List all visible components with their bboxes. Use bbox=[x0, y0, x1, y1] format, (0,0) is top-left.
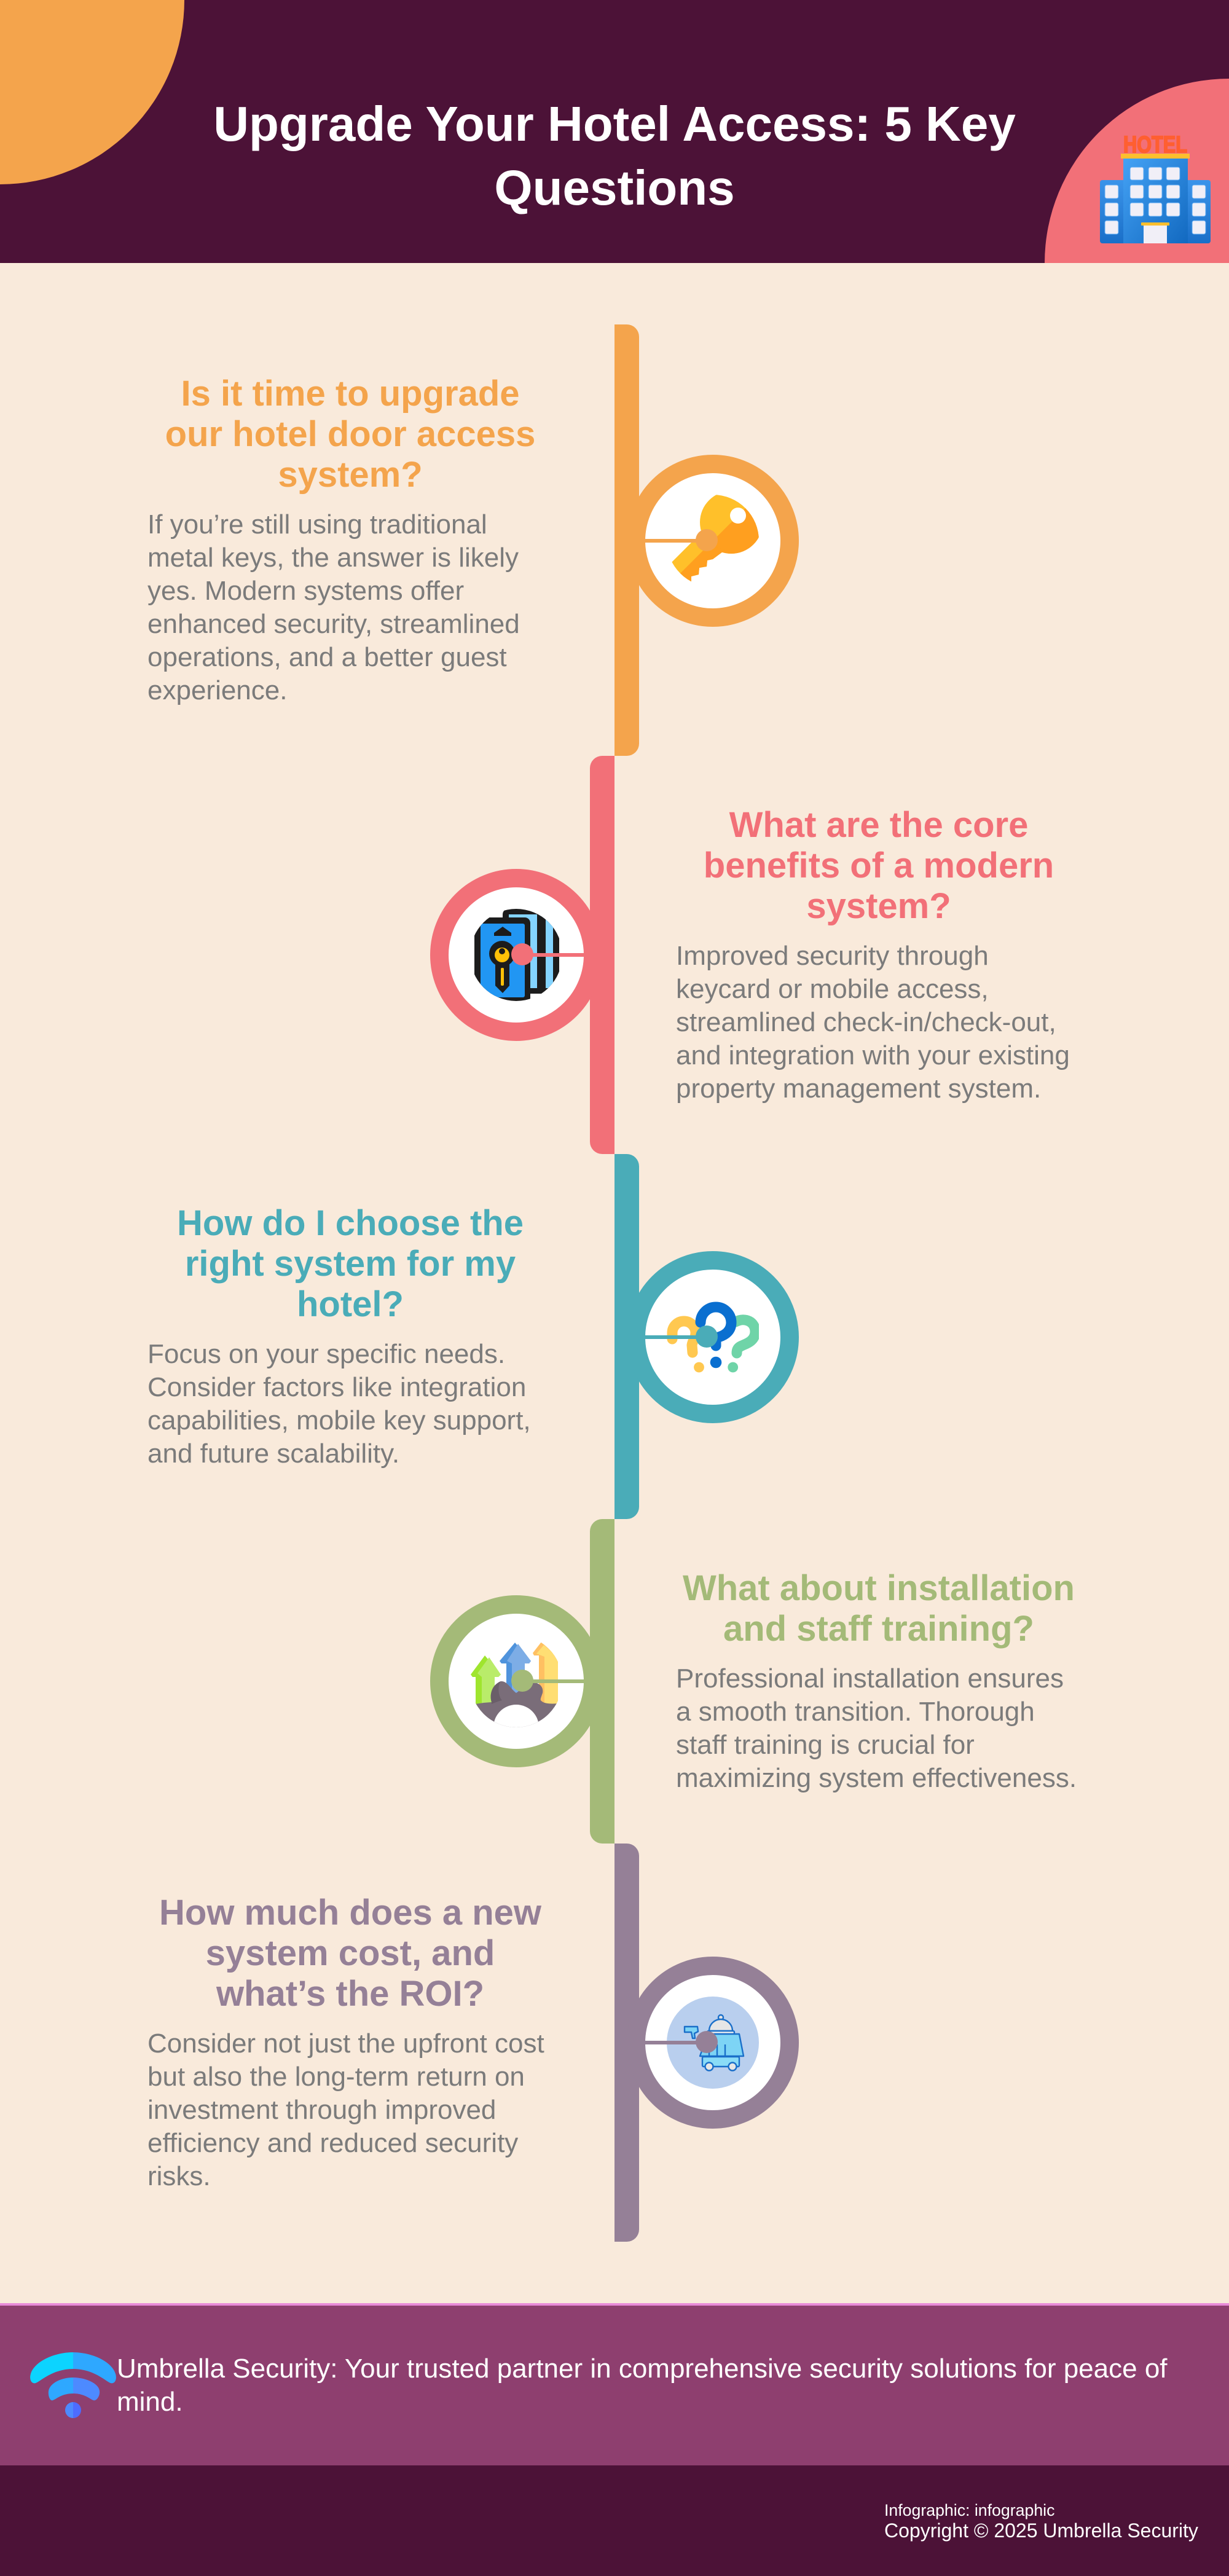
heading bbox=[159, 1893, 541, 2014]
question heading and answer bbox=[676, 805, 1070, 1104]
heading bbox=[177, 1203, 524, 1324]
question heading and answer bbox=[147, 1893, 544, 2191]
answer text: and integration with your existing bbox=[676, 1040, 1070, 1070]
connector dot bbox=[696, 1325, 718, 1348]
answer text bbox=[676, 1663, 1077, 1793]
footer banner bbox=[0, 2303, 1229, 2465]
timeline bar bbox=[614, 1844, 639, 2242]
answer text: enhanced security, streamlined bbox=[147, 609, 520, 639]
footer message: mind. bbox=[117, 2387, 183, 2417]
answer text bbox=[147, 1339, 531, 1469]
heading: what’s the ROI? bbox=[216, 1974, 484, 2014]
heading: our hotel door access bbox=[165, 414, 535, 454]
header band bbox=[0, 0, 1229, 263]
heading: right system for my bbox=[185, 1244, 516, 1284]
answer text: capabilities, mobile key support, bbox=[147, 1405, 531, 1435]
heading: What are the core bbox=[729, 805, 1028, 845]
answer text: staff training is crucial for bbox=[676, 1730, 975, 1760]
icon ring: key card bbox=[430, 869, 602, 1041]
connector line bbox=[522, 1679, 584, 1683]
answer text bbox=[147, 2028, 544, 2191]
answer text: a smooth transition. Thorough bbox=[676, 1697, 1035, 1727]
connector dot bbox=[696, 2031, 718, 2053]
answer text: yes. Modern systems offer bbox=[147, 576, 464, 606]
panel: question 5 bbox=[147, 1844, 799, 2242]
timeline bar bbox=[614, 324, 639, 756]
answer text: property management system. bbox=[676, 1074, 1041, 1104]
answer text: risks. bbox=[147, 2161, 211, 2191]
icon ring: service cart bbox=[627, 1957, 799, 2129]
connector dot bbox=[511, 943, 533, 965]
connector dot bbox=[511, 1670, 533, 1692]
icon: key cards bbox=[474, 909, 559, 1001]
answer text: investment through improved bbox=[147, 2095, 496, 2125]
credit line: Infographic: infographic bbox=[884, 2501, 1054, 2519]
timeline bar bbox=[614, 1154, 639, 1519]
connector dot bbox=[696, 529, 718, 551]
answer text: operations, and a better guest bbox=[147, 642, 507, 672]
panel: question 2 bbox=[430, 756, 1070, 1154]
heading: system? bbox=[806, 886, 951, 926]
answer text bbox=[147, 509, 520, 705]
answer text: experience. bbox=[147, 675, 287, 705]
answer text: and future scalability. bbox=[147, 1439, 399, 1469]
question heading and answer bbox=[147, 1203, 531, 1469]
question heading and answer bbox=[147, 374, 535, 705]
timeline bar bbox=[590, 1519, 614, 1844]
answer text: Consider factors like integration bbox=[147, 1372, 526, 1402]
heading: hotel? bbox=[297, 1284, 404, 1324]
bottom credits band bbox=[0, 2465, 1229, 2576]
answer text: streamlined check-in/check-out, bbox=[676, 1007, 1056, 1037]
timeline bar bbox=[590, 756, 614, 1154]
answer text: Consider not just the upfront cost bbox=[147, 2028, 544, 2059]
icon ring: gear and arrows bbox=[430, 1595, 602, 1767]
heading: Is it time to upgrade bbox=[181, 374, 520, 414]
panel: question 3 bbox=[147, 1154, 799, 1519]
heading: system cost, and bbox=[206, 1933, 495, 1973]
heading: system? bbox=[278, 455, 423, 495]
title: Upgrade Your Hotel Access: 5 Key bbox=[213, 96, 1016, 151]
answer text: keycard or mobile access, bbox=[676, 974, 989, 1004]
icon ring: question marks bbox=[627, 1251, 799, 1423]
answer text: maximizing system effectiveness. bbox=[676, 1763, 1077, 1793]
connector line bbox=[645, 539, 707, 543]
connector line bbox=[522, 953, 584, 957]
heading: How do I choose the bbox=[177, 1203, 524, 1243]
title: Questions bbox=[494, 160, 735, 215]
heading: How much does a new bbox=[159, 1893, 541, 1933]
heading: and staff training? bbox=[723, 1609, 1034, 1649]
copyright: Copyright © 2025 Umbrella Security bbox=[884, 2519, 1198, 2542]
answer text: Focus on your specific needs. bbox=[147, 1339, 505, 1369]
answer text: efficiency and reduced security bbox=[147, 2128, 518, 2158]
icon: gear and upward arrows bbox=[471, 1642, 558, 1727]
answer text: Improved security through bbox=[676, 941, 989, 971]
icon: question marks bbox=[667, 1302, 759, 1373]
decorative orange circle bbox=[0, 0, 184, 184]
answer text: Professional installation ensures bbox=[676, 1663, 1064, 1694]
icon: hotel building bbox=[1100, 134, 1211, 243]
footer message bbox=[117, 2354, 1168, 2417]
icon ring: key bbox=[627, 455, 799, 627]
heading bbox=[683, 1568, 1075, 1649]
icon: wifi signal bbox=[30, 2352, 116, 2418]
connector line bbox=[645, 1335, 707, 1339]
answer text: If you’re still using traditional bbox=[147, 509, 487, 540]
answer text bbox=[676, 941, 1070, 1104]
panel: question 4 bbox=[430, 1519, 1077, 1844]
heading bbox=[165, 374, 535, 495]
question heading and answer bbox=[676, 1568, 1077, 1793]
title bbox=[213, 96, 1016, 215]
heading: benefits of a modern bbox=[704, 846, 1054, 886]
footer message: Umbrella Security: Your trusted partner in comprehensive security solutions for peace of bbox=[117, 2354, 1168, 2384]
panel: question 1 bbox=[147, 324, 799, 756]
decorative pink circle bbox=[1045, 79, 1229, 447]
answer text: metal keys, the answer is likely bbox=[147, 543, 519, 573]
icon: room service cart bbox=[667, 1997, 759, 2089]
icon: key bbox=[672, 495, 759, 581]
heading: What about installation bbox=[683, 1568, 1075, 1608]
connector line bbox=[645, 2041, 707, 2044]
answer text: but also the long-term return on bbox=[147, 2062, 525, 2092]
heading bbox=[704, 805, 1054, 926]
